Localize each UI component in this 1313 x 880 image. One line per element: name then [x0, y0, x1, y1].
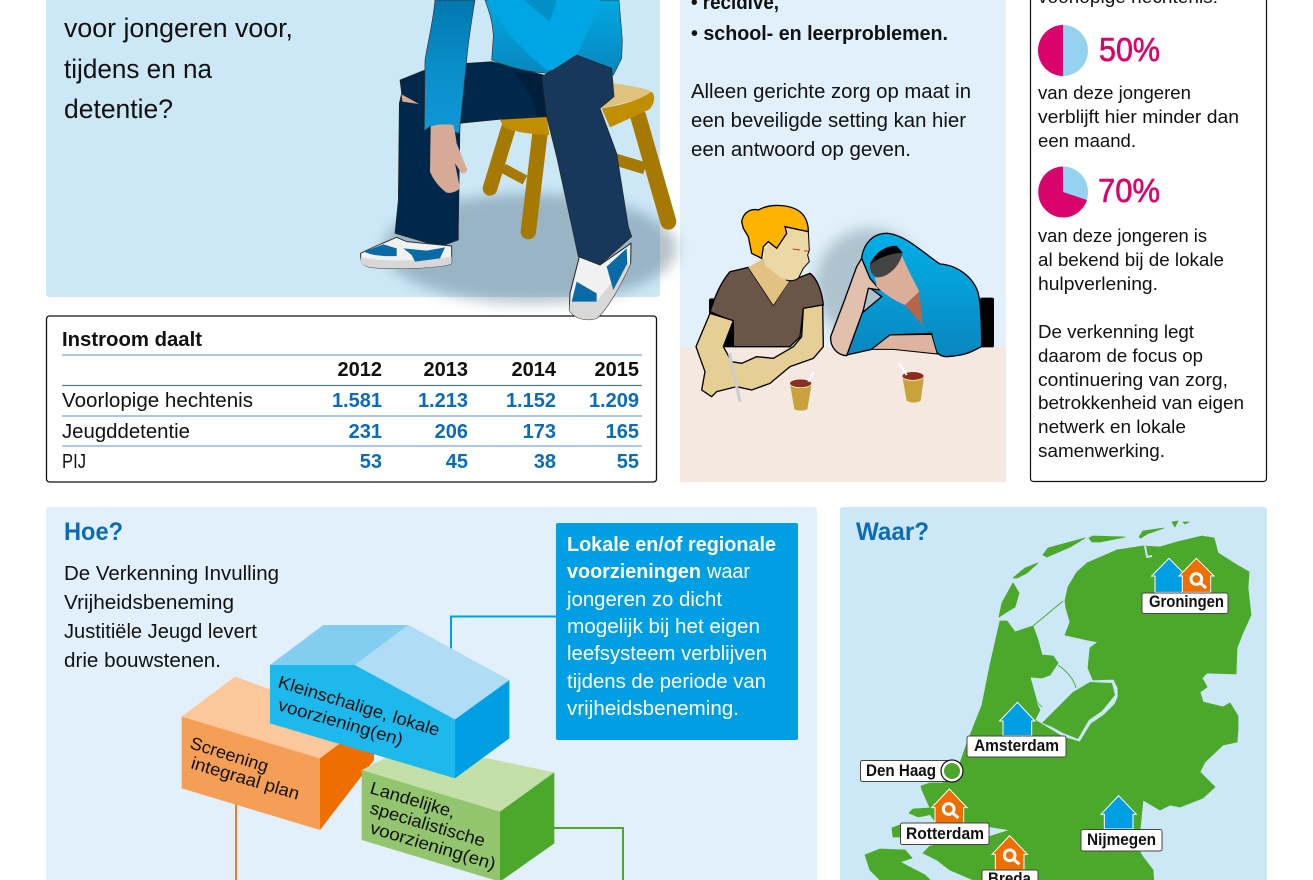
text: 70% toelichting: [1038, 225, 1224, 294]
table: instroom daalt: PIJ: [62, 451, 86, 473]
text: drie bouwstenen: [64, 563, 279, 672]
text: 70% toelichting: hulpverlening.: [1038, 273, 1158, 294]
callout: lokale en regionale voorzieningen: Lokale en/of regionale: [567, 533, 776, 556]
text: focus verkenning: betrokkenheid van eigen: [1038, 392, 1244, 413]
heading: Hoe?: Hoe?: [64, 518, 123, 546]
diagram: bouwstenen: [182, 625, 554, 880]
text: focus verkenning: daarom de focus op: [1038, 345, 1203, 366]
block: kleinschalige lokale voorziening: [270, 625, 509, 778]
text: drie bouwstenen: Vrijheidsbeneming: [64, 592, 234, 614]
text: 50% toelichting: een maand.: [1038, 130, 1136, 151]
pie chart: 50%: [1038, 25, 1088, 76]
label: Rotterdam: Rotterdam: [906, 825, 984, 843]
table: instroom daalt: 1.581: [332, 390, 382, 412]
text: 50% toelichting: [1038, 82, 1239, 151]
icon: huis Amsterdam: [1000, 702, 1035, 736]
table: instroom daalt: 231: [349, 421, 382, 443]
connector: screening: [235, 800, 237, 880]
callout: lokale en regionale voorzieningen: jongeren zo dicht: [566, 588, 722, 611]
callout: lokale en regionale voorzieningen: tijdens de periode van: [567, 670, 766, 693]
block: kleinschalige lokale voorziening: Kleinschalige, lokale: [276, 672, 442, 740]
pie chart: 70%: [1038, 166, 1088, 218]
label: Nijmegen: Nijmegen: [1087, 831, 1156, 849]
heading: vraag: [64, 13, 293, 124]
text: gerichte zorg: een beveiligde setting kan hier: [691, 110, 966, 132]
label: Den Haag: Den Haag: [866, 762, 936, 780]
text: 50% toelichting: verblijft hier minder dan: [1038, 106, 1239, 127]
block: landelijke voorziening: voorziening(en): [368, 818, 498, 874]
block: kleinschalige lokale voorziening: voorziening(en): [276, 695, 405, 749]
table: instroom daalt: Instroom daalt: [62, 329, 202, 351]
block: screening integraal plan: integraal plan: [189, 753, 302, 804]
table: instroom daalt: 55: [617, 451, 639, 473]
text: 70% toelichting: al bekend bij de lokale: [1038, 249, 1224, 270]
text: focus verkenning: [1038, 321, 1244, 461]
callout: lokale en regionale voorzieningen: voorzieningen: [567, 560, 701, 583]
text: 70% toelichting: van deze jongeren is: [1038, 225, 1207, 246]
icon: huis Breda: [992, 836, 1027, 870]
text: drie bouwstenen: De Verkenning Invulling: [64, 563, 279, 585]
text: opsomming: • school- en leerproblemen.: [691, 23, 948, 45]
table: instroom daalt: 45: [446, 451, 468, 473]
callout: lokale en regionale voorzieningen: [556, 523, 798, 740]
panel: waar: [840, 507, 1267, 880]
table: instroom daalt: Voorlopige hechtenis: [62, 390, 253, 412]
illustration: begeleider en jongere aan tafel: [680, 205, 1006, 482]
label: Groningen: Groningen: [1149, 593, 1224, 611]
icon: huis Rotterdam: [932, 789, 967, 823]
text: focus verkenning: netwerk en lokale: [1038, 416, 1186, 437]
heading: vraag: tijdens en na: [64, 54, 213, 84]
table: instroom daalt: 1.152: [506, 390, 556, 412]
text: gerichte zorg: een antwoord op geven.: [691, 139, 911, 161]
table: instroom daalt: 1.209: [589, 390, 639, 412]
illustration: jongere op kruk: [361, 0, 677, 320]
table: instroom daalt: 173: [523, 421, 556, 443]
table: instroom daalt: 2015: [594, 359, 639, 381]
block: landelijke voorziening: specialistische: [368, 798, 488, 851]
table: instroom daalt: 1.213: [418, 390, 468, 412]
text: drie bouwstenen: drie bouwstenen.: [64, 650, 221, 672]
panel: voorlopige hechtenis feiten: [1030, 0, 1266, 482]
table: instroom daalt: 38: [534, 451, 556, 473]
stat: 50%: 50%: [1099, 31, 1160, 68]
label: Den Haag: [860, 760, 963, 782]
table: instroom daalt: 53: [360, 451, 382, 473]
text: 50% toelichting: van deze jongeren: [1038, 82, 1191, 103]
block: landelijke voorziening: Landelijke,: [368, 778, 458, 822]
table: instroom daalt: Jeugddetentie: [62, 421, 190, 443]
text: opsomming: [691, 0, 948, 45]
callout: lokale en regionale voorzieningen: vrijheidsbeneming.: [567, 697, 739, 720]
text: drie bouwstenen: Justitiële Jeugd levert: [64, 621, 257, 643]
table: instroom daalt: 206: [435, 421, 468, 443]
text: gerichte zorg: Alleen gerichte zorg op maat in: [691, 81, 971, 103]
table: instroom daalt: 2014: [512, 359, 557, 381]
heading: Waar?: Waar?: [856, 518, 929, 546]
block: landelijke voorziening: [362, 743, 554, 880]
icon: huis Nijmegen: [1101, 796, 1136, 829]
callout: lokale en regionale voorzieningen: mogelijk bij het eigen: [567, 615, 760, 638]
block: screening integraal plan: [182, 677, 374, 830]
map: Nederland: [865, 521, 1251, 880]
block: screening integraal plan: Screening: [188, 733, 271, 776]
text: focus verkenning: continuering van zorg,: [1038, 369, 1228, 390]
table: instroom daalt: 2012: [338, 359, 382, 381]
label: Amsterdam: Amsterdam: [974, 737, 1059, 755]
text: focus verkenning: samenwerking.: [1038, 440, 1165, 461]
table: instroom daalt: 2013: [424, 359, 468, 381]
callout: lokale en regionale voorzieningen: leefsysteem verblijven: [567, 642, 767, 665]
table: instroom daalt: 165: [606, 421, 639, 443]
table: instroom daalt: [46, 316, 656, 482]
heading: vraag: detentie?: [64, 94, 173, 124]
stat: 70%: 70%: [1098, 172, 1160, 209]
icon: huis Groningen: [1152, 558, 1214, 592]
connector: landelijke voorzieningen: [550, 828, 623, 880]
text: gerichte zorg: [691, 81, 971, 161]
callout: lokale en regionale voorzieningen: waar: [706, 560, 750, 583]
panel: vraag met jongere op kruk: [46, 0, 660, 297]
text: focus verkenning: De verkenning legt: [1038, 321, 1194, 342]
panel: risicofactoren en zorg: [680, 0, 1006, 482]
panel: hoe: [46, 507, 817, 880]
heading: vraag: voor jongeren voor,: [64, 13, 293, 43]
connector: lokale voorzieningen: [451, 616, 556, 655]
